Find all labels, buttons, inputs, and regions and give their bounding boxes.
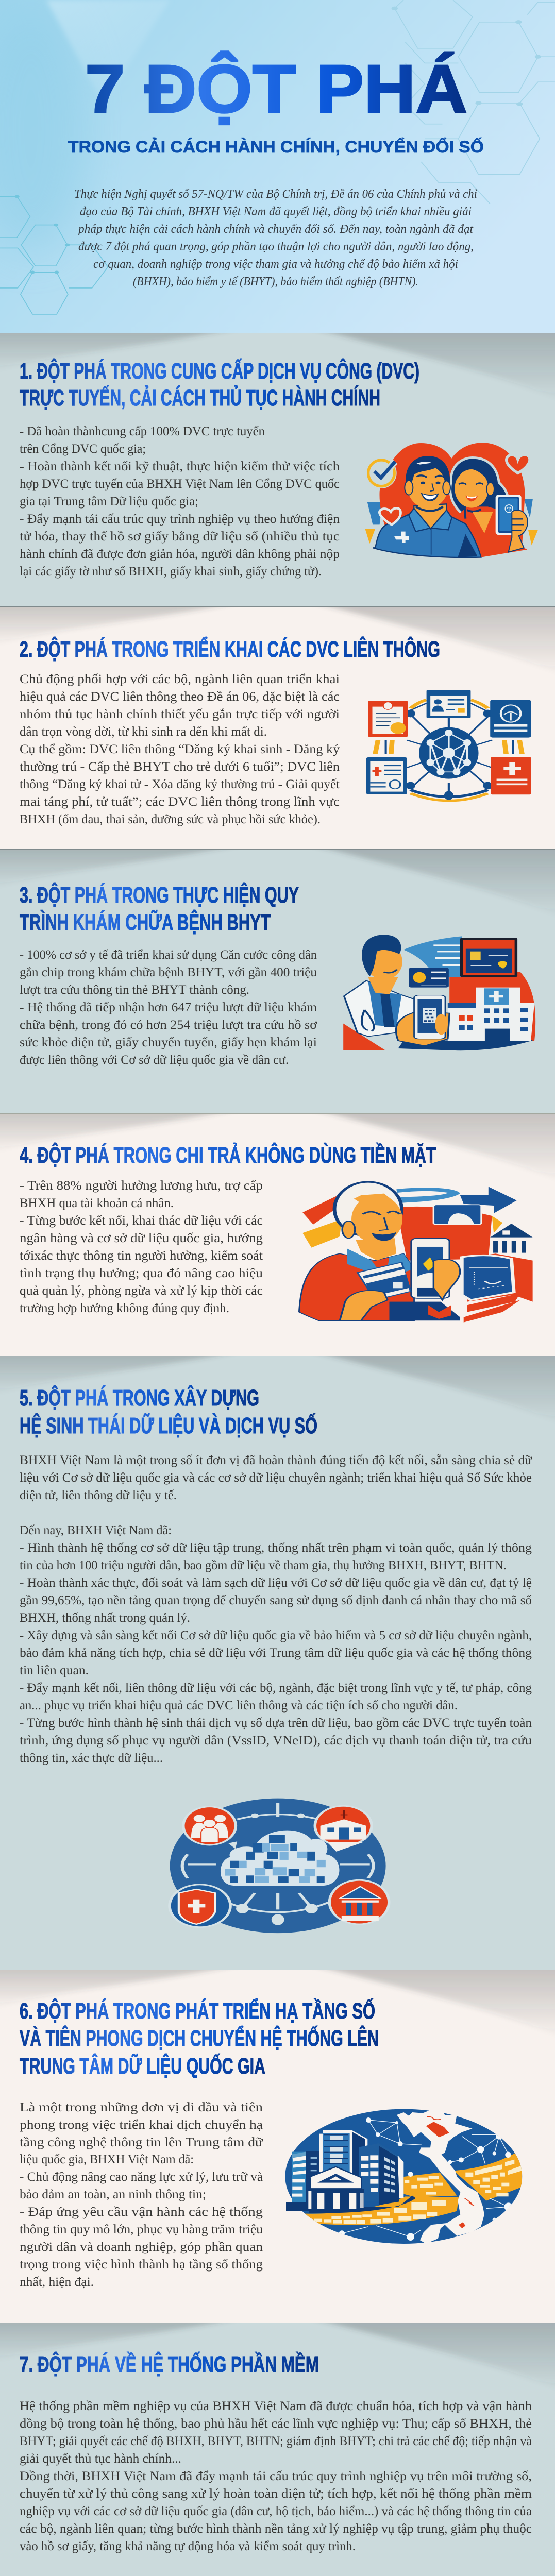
text block: section 5: gần 99,65%, tạo nền tảng quan trọng để chuyển sang sử dụng số định danh cá nhân thay cho mã số xyxy=(20,1594,532,1607)
text block: section 4: tình trạng thụ hưởng; qua đó nâng cao hiệu xyxy=(20,1266,263,1280)
panel: section 2 xyxy=(0,597,555,850)
text block: section 1: - Hoàn thành kết nối kỹ thuật, thực hiện kiểm thử việc tích xyxy=(20,460,340,473)
heading: section 6: TRUNG TÂM DỮ LIỆU QUỐC GIA xyxy=(20,2053,265,2079)
icon: doctor with health insurance card and hospital xyxy=(343,935,535,1050)
heading: section 6 xyxy=(20,1997,379,2079)
panel: section 5 xyxy=(0,1346,555,1970)
text block: section 6: trọng trong việc hình thành hạ tầng số thống xyxy=(20,2258,263,2272)
text block: section 4: - Từng bước kết nối, khai thác dữ liệu với các xyxy=(20,1214,263,1228)
text block: section 1 xyxy=(20,425,340,579)
text block: section 5: Đến nay, BHXH Việt Nam đã: xyxy=(20,1523,172,1537)
text block: section 6: Là một trong những đơn vị đi đầu và tiên xyxy=(20,2100,263,2114)
text block: section 5 xyxy=(20,1453,532,1765)
icon: data cloud ecosystem xyxy=(168,1799,391,1933)
text block: section 2 xyxy=(20,672,340,826)
text block: section 2: hiệu quả các DVC liên thông theo Đề án 06, đặc biệt là các xyxy=(20,690,340,704)
intro text block: Thực hiện Nghị quyết số 57-NQ/TW của Bộ Chính trị, Đề án 06 của Chính phủ và chỉ xyxy=(74,188,477,201)
title: 7 ĐỘT PHÁ xyxy=(85,51,467,127)
text block: section 4: ngân hàng và cơ sở dữ liệu quốc gia, hướng xyxy=(20,1231,263,1245)
text block: section 1: hợp DVC trực tuyến của BHXH Việt Nam lên Cổng DVC quốc xyxy=(20,477,340,491)
text block: section 2: BHXH (ốm đau, thai sản, dưỡng sức và phục hồi sức khỏe). xyxy=(20,812,321,826)
panel: section 3 xyxy=(0,839,555,1114)
heading: section 1: TRỰC TUYẾN, CẢI CÁCH THỦ TỤC HÀNH CHÍNH xyxy=(20,384,380,411)
heading: section 3: TRÌNH KHÁM CHỮA BỆNH BHYT xyxy=(20,909,271,935)
text block: section 6: - Chủ động nâng cao năng lực xử lý, lưu trữ và xyxy=(20,2170,263,2184)
text block: section 7: giải quyết thủ tục hành chính... xyxy=(20,2452,181,2466)
text block: section 2: thông “Đăng ký khai tử - Xóa đăng ký thường trú - Giải quyết xyxy=(20,777,340,791)
heading: section 7: 7. ĐỘT PHÁ VỀ HỆ THỐNG PHẦN MỀM xyxy=(20,2351,319,2377)
text block: section 5: - Hình thành hệ thống cơ sở dữ liệu tập trung, thống nhất trên phạm vi toàn quốc, quản lý thông xyxy=(20,1541,532,1555)
text block: section 5: BHXH, thống nhất trong quản lý. xyxy=(20,1611,190,1625)
heading: section 5 xyxy=(20,1384,317,1438)
heading: section 1 xyxy=(20,358,419,411)
text block: section 7: nghiệp vụ với các cơ sở dữ liệu quốc gia (dân cư, hộ tịch, bảo hiểm...) và các hệ thống thông tin của xyxy=(20,2504,532,2518)
text block: section 5: liệu với Cơ sở dữ liệu quốc gia và các cơ sở dữ liệu chuyên ngành; triển khai hiệu quả Sổ Sức khỏe xyxy=(20,1471,532,1485)
panel: section 4 xyxy=(0,1104,555,1356)
text block: section 4: BHXH qua tài khoản cá nhân. xyxy=(20,1196,174,1210)
text block: section 5: an... phục vụ triển khai hiệu quả các DVC liên thông và các tiện ích số cho người dân. xyxy=(20,1699,458,1713)
intro text block: được 7 đột phá quan trọng, góp phần tạo thuận lợi cho người dân, người lao động, xyxy=(78,240,474,253)
text block: section 5: bảo đảm khả năng tích hợp, chia sẻ dữ liệu với Trung tâm dữ liệu quốc gia và các hệ thống thông xyxy=(20,1646,532,1660)
intro text block: pháp thực hiện cải cách hành chính và chuyển đổi số. Đến nay, toàn ngành đã đạt xyxy=(77,223,474,236)
text block: section 4: trường hợp hưởng không đúng quy định. xyxy=(20,1301,229,1315)
text block: section 6: người dân và doanh nghiệp, góp phần quan xyxy=(20,2240,263,2254)
text block: section 6 xyxy=(20,2100,264,2289)
heading: section 5: 5. ĐỘT PHÁ TRONG XÂY DỰNG xyxy=(20,1384,259,1411)
text block: section 7: Đồng thời, BHXH Việt Nam đã đẩy mạnh tái cấu trúc quy trình nghiệp vụ trên môi trường số, xyxy=(20,2469,532,2483)
text block: section 5: - Đẩy mạnh kết nối, liên thông dữ liệu với các bộ, ngành, đặc biệt trong lĩnh vực y tế, tư pháp, công xyxy=(20,1681,532,1695)
text block: section 3 xyxy=(20,948,317,1067)
text block: section 7 xyxy=(20,2399,532,2553)
text block: section 7: vào hồ sơ giấy, tăng khả năng tự động hóa và kiểm soát quy trình. xyxy=(20,2539,356,2553)
text block: section 3: - Hệ thống đã tiếp nhận hơn 647 triệu lượt dữ liệu khám xyxy=(20,1001,317,1014)
text block: section 6: - Đáp ứng yêu cầu vận hành các hệ thống xyxy=(20,2205,263,2219)
text block: section 3: sức khỏe điện tử, giấy chuyển tuyến, giấy hẹn khám lại xyxy=(20,1036,317,1049)
heading: section 3: 3. ĐỘT PHÁ TRONG THỰC HIỆN QUY xyxy=(20,882,299,908)
text block: section 7: đồng bộ trong toàn hệ thống, bao phủ hầu hết các lĩnh vực nghiệp vụ: Thu; cấp sổ BHXH, thẻ xyxy=(20,2417,532,2431)
text block: section 2: Chủ động phối hợp với các bộ, ngành liên quan triển khai xyxy=(20,672,340,686)
text block: section 4: - Trên 88% người hưởng lương hưu, trợ cấp xyxy=(20,1179,263,1193)
text block: section 1: tử hóa, thay thế hồ sơ giấy bằng dữ liệu số (nhiều thủ tục xyxy=(20,530,340,544)
text block: section 2: thường trú - Cấp thẻ BHYT cho trẻ dưới 6 tuổi”; DVC liên xyxy=(20,760,340,774)
text block: section 5: tin liên quan. xyxy=(20,1664,89,1677)
text block: section 5: điện tử, liên thông dữ liệu y tế. xyxy=(20,1488,177,1502)
text block: section 1: hành chính đã được đơn giản hóa, người dân không phải nộp xyxy=(20,547,340,561)
icon: connected services network xyxy=(366,690,531,801)
text block: section 1: trên Cổng DVC quốc gia; xyxy=(20,442,146,456)
text block: section 1: lại các giấy tờ như sổ BHXH, giấy khai sinh, giấy chứng tử). xyxy=(20,565,322,579)
icon: retiree using cashless payment xyxy=(299,1182,533,1323)
text block: section 4: quả quản lý, phòng ngừa và xử lý kịp thời các xyxy=(20,1284,263,1298)
text block: section 3: được liên thông với Cơ sở dữ liệu quốc gia về dân cư. xyxy=(20,1053,289,1067)
text block: section 5: - Từng bước hình thành hệ sinh thái dịch vụ số dựa trên dữ liệu, bao gồm các DVC trực tuyến toàn xyxy=(20,1716,532,1730)
heading: section 6: 6. ĐỘT PHÁ TRONG PHÁT TRIỂN HẠ TẦNG SỐ xyxy=(20,1997,375,2024)
icon: couple with phone xyxy=(365,443,538,557)
heading: section 6: VÀ TIÊN PHONG DỊCH CHUYỂN HỆ THỐNG LÊN xyxy=(20,2025,379,2051)
text block: section 5: trình, ứng dụng số phục vụ người dân (VssID, VNeID), các dịch vụ thanh toán điện tử, tra cứu xyxy=(20,1734,532,1748)
panel: section 1 xyxy=(0,323,555,607)
text block: section 5: - Hoàn thành xác thực, đối soát và làm sạch dữ liệu với Cơ sở dữ liệu quốc gia về dân cư, đạt tỷ lệ xyxy=(20,1576,532,1590)
text block: section 6: bảo đảm an toàn, an ninh thông tin; xyxy=(20,2188,206,2201)
panel: hero header xyxy=(0,0,555,333)
icon: digital infrastructure map of Vietnam xyxy=(285,2108,522,2245)
intro text block: đạo của Bộ Tài chính, BHXH Việt Nam đã quyết liệt, đồng bộ triển khai nhiều giải xyxy=(80,205,472,218)
text block: section 5: tin của hơn 100 triệu người dân, bao gồm dữ liệu về tham gia, thụ hưởng BHXH, BHYT, BHTN. xyxy=(20,1558,507,1572)
text block: section 4: tớixác thực thông tin người hưởng, kiểm soát xyxy=(20,1249,263,1263)
text block: section 1: - Đẩy mạnh tái cấu trúc quy trình nghiệp vụ theo hướng điện xyxy=(20,512,340,526)
panel: section 7 xyxy=(0,2313,555,2576)
heading: section 5: HỆ SINH THÁI DỮ LIỆU VÀ DỊCH VỤ SỐ xyxy=(20,1412,317,1438)
text block: section 5: - Xây dựng và sẵn sàng kết nối Cơ sở dữ liệu quốc gia về bảo hiểm và 5 cơ sở dữ liệu chuyên ngành, xyxy=(20,1629,532,1642)
text block: section 6: liệu quốc gia, BHXH Việt Nam đã: xyxy=(20,2153,194,2166)
text block: section 1: - Đã hoàn thànhcung cấp 100% DVC trực tuyến xyxy=(20,425,265,438)
text block: section 2: nhóm thủ tục hành chính thiết yếu gắn trực tiếp với người xyxy=(20,707,340,721)
text block: section 2: mai táng phí, tử tuất”; các DVC liên thông trong lĩnh vực xyxy=(20,795,340,809)
intro text block xyxy=(74,188,477,289)
text block: section 1: gia tại Trung tâm Dữ liệu quốc gia; xyxy=(20,495,198,509)
text block: section 6: tầng công nghệ thông tin lên Trung tâm dữ xyxy=(20,2136,264,2149)
heading: section 3 xyxy=(20,882,299,935)
text block: section 6: thông tin quy mô lớn, phục vụ hàng trăm triệu xyxy=(20,2223,263,2236)
text block: section 7: chuyển từ xử lý thủ công sang xử lý hoàn toàn điện tử; tích hợp, kết nối hệ thống phần mềm xyxy=(20,2487,532,2501)
text block: section 5: thông tin, xác thực dữ liệu... xyxy=(20,1751,163,1765)
text block: section 6: phong trong việc triển khai dịch chuyển hạ xyxy=(20,2118,263,2132)
text block: section 7: Hệ thống phần mềm nghiệp vụ của BHXH Việt Nam đã được chuẩn hóa, tích hợp và vận hành xyxy=(20,2399,532,2413)
intro text block: (BHXH), bảo hiểm y tế (BHYT), bảo hiểm thất nghiệp (BHTN). xyxy=(133,275,418,289)
panel: section 6 xyxy=(0,1959,555,2323)
text block: section 5: BHXH Việt Nam là một trong số ít đơn vị đã hoàn thành đúng tiến độ kết nối, sẵn sàng chia sẻ dữ xyxy=(20,1453,532,1467)
subtitle: TRONG CẢI CÁCH HÀNH CHÍNH, CHUYỂN ĐỔI SỐ xyxy=(68,138,484,156)
text block: section 3: lượt tra cứu thông tin thẻ BHYT thành công. xyxy=(20,983,249,997)
text block: section 3: gắn chip trong khám chữa bệnh BHYT, với gần 400 triệu xyxy=(20,965,317,979)
text block: section 3: chữa bệnh, trong đó có hơn 254 triệu lượt tra cứu hồ sơ xyxy=(20,1018,317,1032)
text block: section 7: BHYT; giải quyết các chế độ BHXH, BHYT, BHTN; giám định BHYT; chi trả các chế độ; tiếp nhận và xyxy=(20,2434,532,2448)
text block: section 2: Cụ thể gồm: DVC liên thông “Đăng ký khai sinh - Đăng ký xyxy=(20,742,340,756)
text block: section 7: các bộ, ngành liên quan; từng bước hình thành nền tảng xử lý nghiệp vụ tập trung, giảm phụ thuộc xyxy=(20,2522,532,2536)
text block: section 6: nhất, hiện đại. xyxy=(20,2275,94,2289)
intro text block: cơ quan, doanh nghiệp trong việc tham gia và hưởng chế độ bảo hiểm xã hội xyxy=(93,258,458,271)
text block: section 2: dân trọn vòng đời, từ khi sinh ra đến khi mất đi. xyxy=(20,725,267,739)
text block: section 3: - 100% cơ sở y tế đã triển khai sử dụng Căn cước công dân xyxy=(20,948,317,962)
text block: section 4 xyxy=(20,1179,263,1315)
